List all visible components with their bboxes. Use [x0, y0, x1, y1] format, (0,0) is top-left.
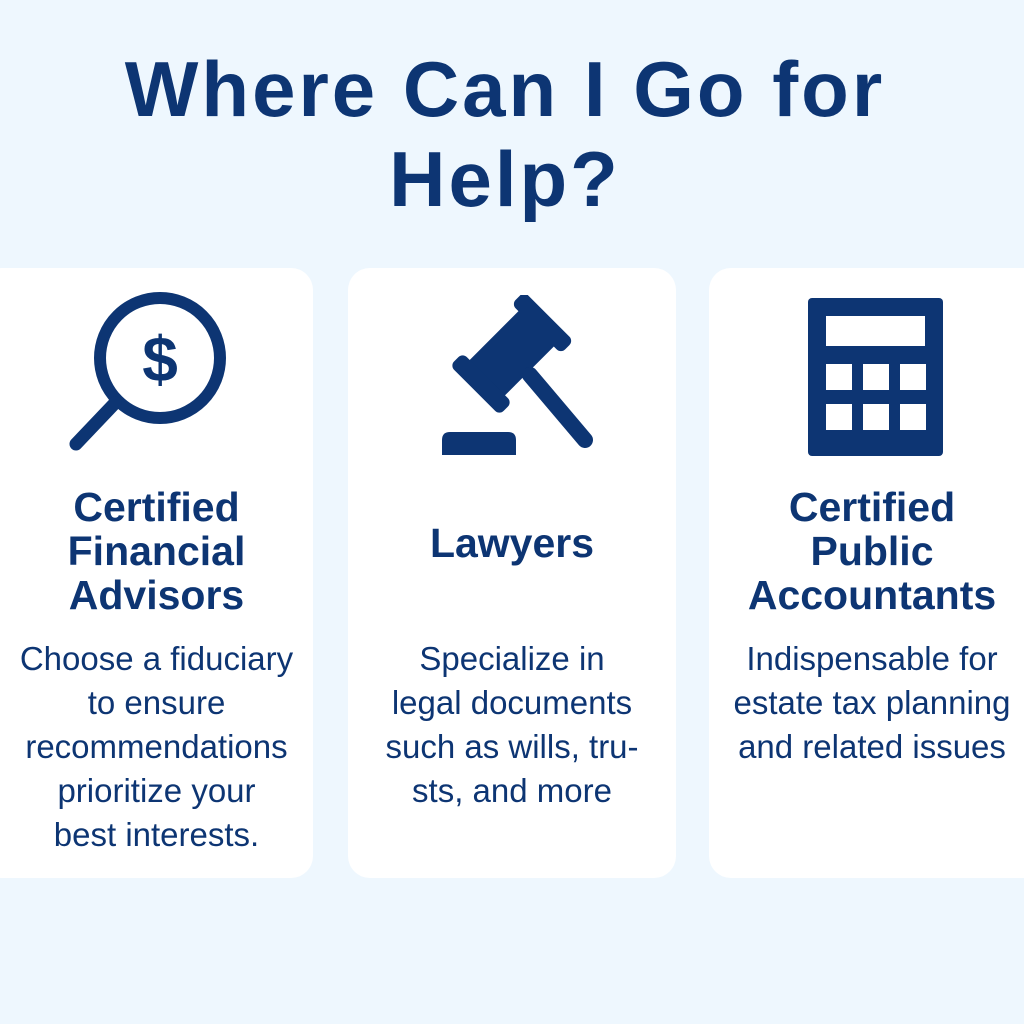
text: accountants: and related issues [738, 728, 1006, 765]
heading: accountants [748, 484, 996, 618]
icon: magnifier with dollar [70, 292, 226, 450]
heading: accountants: Accountants [748, 572, 996, 618]
icon: magnifier with dollar: $ [142, 323, 178, 395]
heading: financial advisors: Advisors [69, 572, 244, 618]
heading: financial advisors: Financial [68, 528, 245, 574]
icon: gavel [442, 295, 593, 455]
heading: accountants: Certified [789, 484, 955, 530]
panel: lawyers [348, 268, 676, 878]
text: lawyers: legal documents [392, 684, 632, 721]
heading: financial advisors [68, 484, 245, 618]
text: financial advisors: recommendations [25, 728, 288, 765]
text: lawyers [385, 640, 639, 809]
text: financial advisors: to ensure [88, 684, 225, 721]
heading: accountants: Public [810, 528, 934, 574]
panel: financial advisors [0, 268, 313, 878]
heading: financial advisors: Certified [73, 484, 240, 530]
title: Where Can I Go for [125, 45, 885, 133]
text: accountants [733, 640, 1011, 765]
heading: lawyers: Lawyers [430, 520, 594, 566]
icon: calculator [808, 298, 943, 456]
text: financial advisors: best interests. [54, 816, 259, 853]
text: financial advisors: prioritize your [57, 772, 256, 809]
text: accountants: estate tax planning [733, 684, 1011, 721]
text: lawyers: sts, and more [412, 772, 612, 809]
text: lawyers: Specialize in [419, 640, 605, 677]
text: lawyers: such as wills, tru- [385, 728, 639, 765]
text: accountants: Indispensable for [746, 640, 998, 677]
text: financial advisors [20, 640, 293, 853]
panel: accountants [709, 268, 1024, 878]
title [124, 45, 885, 223]
title: Help? [389, 135, 621, 223]
text: financial advisors: Choose a fiduciary [20, 640, 293, 677]
